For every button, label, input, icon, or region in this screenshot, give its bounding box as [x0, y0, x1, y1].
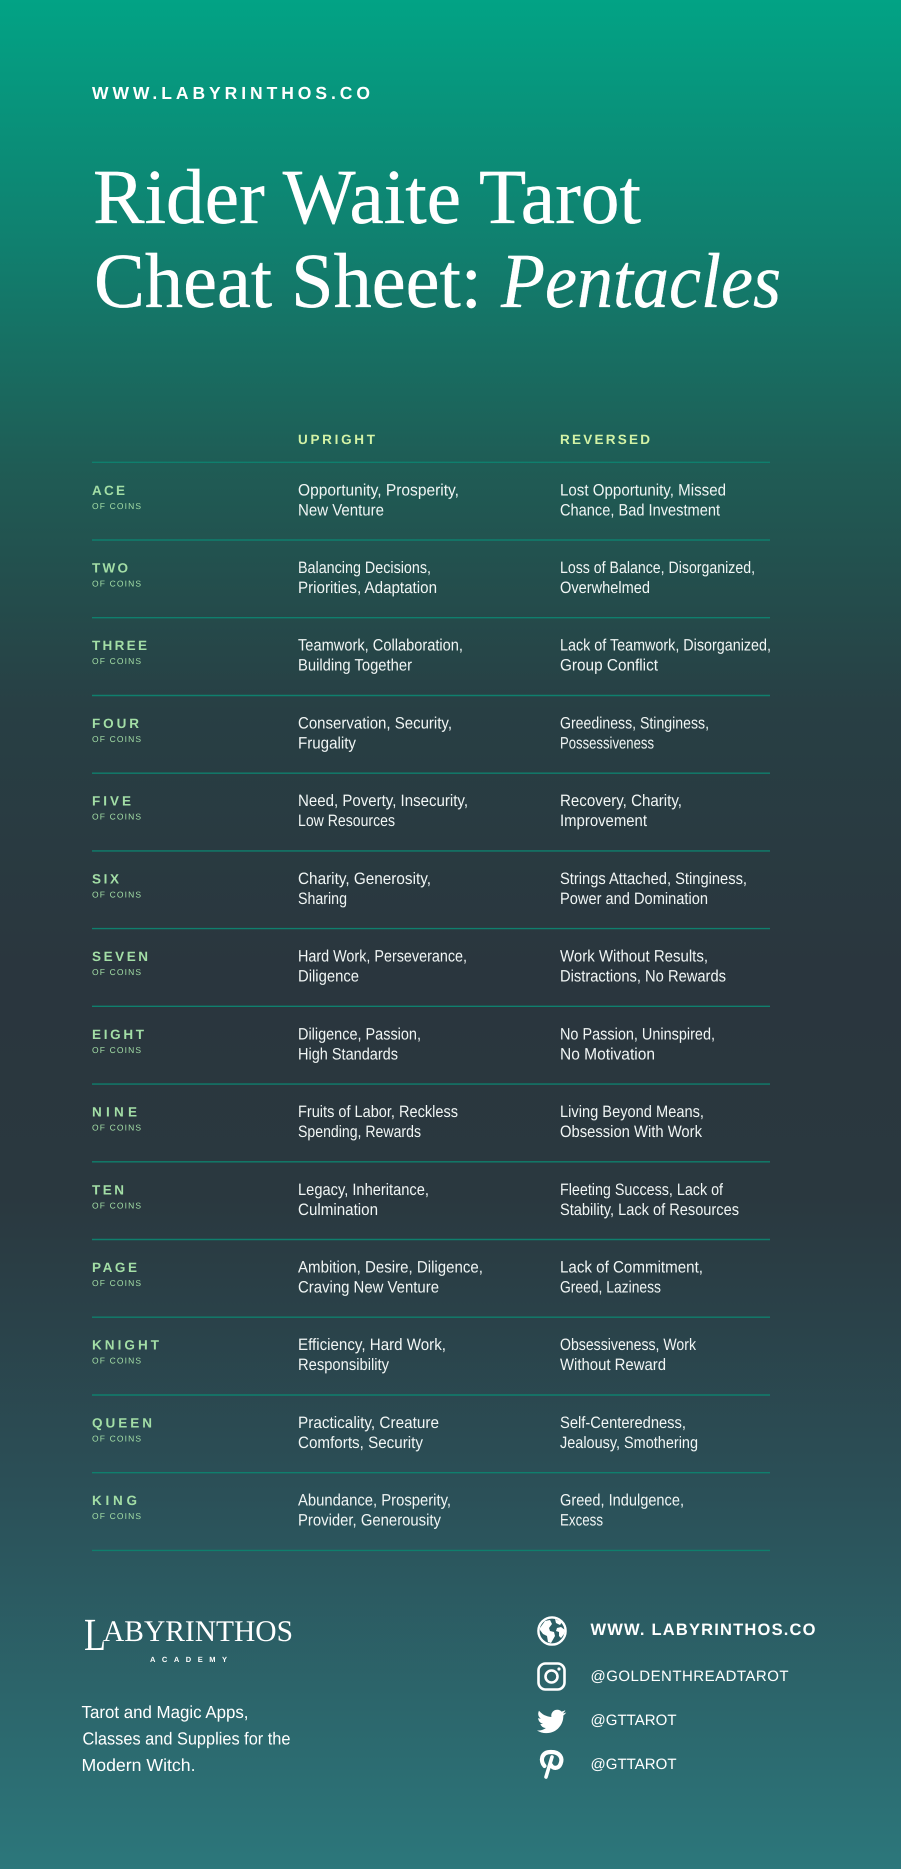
row: knight of coins: KNIGHT [92, 1338, 160, 1353]
row: queen of coins: QUEEN [92, 1416, 152, 1430]
row: five of coins: Low Resources [298, 812, 395, 830]
row: ace of coins: ACE [92, 483, 125, 498]
row: four of coins: FOUR [92, 716, 139, 731]
row: king of coins [92, 1492, 684, 1530]
row: two of coins: Priorities, Adaptation [298, 579, 437, 597]
row: four of coins [92, 714, 709, 752]
footer logo: ABYRINTHOS [103, 1615, 293, 1648]
row: ace of coins: OF COINS [92, 501, 141, 511]
row: seven of coins: Hard Work, Perseverance, [298, 948, 467, 966]
row: nine of coins [92, 1103, 704, 1141]
row: page of coins: Craving New Venture [298, 1278, 439, 1296]
contact: pinterest handle: @GTTAROT [590, 1756, 676, 1773]
row: queen of coins: Comforts, Security [298, 1434, 424, 1452]
row: three of coins: OF COINS [92, 656, 141, 666]
row: king of coins: KING [92, 1493, 137, 1508]
row: nine of coins: Fruits of Labor, Reckless [298, 1103, 458, 1121]
row: seven of coins: Distractions, No Rewards [560, 968, 726, 986]
row: ten of coins: OF COINS [92, 1200, 141, 1210]
row: eight of coins: No Motivation [560, 1045, 655, 1063]
footer logo [84, 1609, 293, 1664]
column headings: UPRIGHT [298, 432, 376, 447]
icon: instagram [538, 1664, 564, 1690]
row: ace of coins [92, 481, 726, 519]
row: knight of coins: Without Reward [560, 1356, 666, 1374]
row: eight of coins: OF COINS [92, 1045, 141, 1055]
row: three of coins [92, 637, 771, 675]
row: eight of coins: EIGHT [92, 1027, 145, 1042]
row: three of coins: Group Conflict [560, 657, 658, 675]
row: four of coins: Possessiveness [560, 734, 654, 752]
title: Rider Waite Tarot [93, 153, 641, 240]
row: eight of coins [92, 1025, 715, 1063]
contact: instagram handle: @GOLDENTHREADTAROT [590, 1668, 788, 1685]
row: page of coins: OF COINS [92, 1278, 141, 1288]
row: four of coins: OF COINS [92, 734, 141, 744]
row: king of coins: Abundance, Prosperity, [298, 1492, 451, 1510]
icon: pinterest [542, 1752, 561, 1777]
row: five of coins: Improvement [560, 812, 647, 830]
row: page of coins: PAGE [92, 1260, 137, 1275]
row: knight of coins: Efficiency, Hard Work, [298, 1336, 446, 1354]
row: ace of coins: Lost Opportunity, Missed [560, 481, 726, 499]
title: Cheat Sheet: [94, 237, 482, 324]
row: six of coins: SIX [92, 871, 119, 886]
row: ten of coins: Legacy, Inheritance, [298, 1181, 429, 1199]
row: ten of coins: Stability, Lack of Resources [560, 1201, 739, 1219]
row: queen of coins: OF COINS [92, 1434, 141, 1444]
row: five of coins: Recovery, Charity, [560, 792, 682, 810]
row: five of coins [92, 792, 682, 830]
row: two of coins: OF COINS [92, 578, 141, 588]
row: six of coins: Strings Attached, Stinginess, [560, 870, 747, 888]
contact: website: WWW. LABYRINTHOS.CO [590, 1621, 816, 1639]
row: ten of coins: Culmination [298, 1201, 378, 1219]
row: five of coins: OF COINS [92, 812, 141, 822]
row: nine of coins: Obsession With Work [560, 1123, 703, 1141]
row: six of coins: OF COINS [92, 889, 141, 899]
footer tagline: Tarot and Magic Apps, [82, 1702, 248, 1722]
row: ten of coins: TEN [92, 1182, 124, 1197]
row: seven of coins: OF COINS [92, 967, 141, 977]
row: two of coins: Loss of Balance, Disorganized, [560, 559, 755, 577]
column headings: REVERSED [560, 432, 650, 447]
icon: twitter [537, 1710, 566, 1733]
column headings [298, 432, 650, 447]
row: six of coins: Sharing [298, 890, 347, 908]
row: ten of coins [92, 1181, 739, 1219]
row: ace of coins: Chance, Bad Investment [560, 501, 720, 519]
row: queen of coins: Self-Centeredness, [560, 1414, 686, 1432]
row: ten of coins: Fleeting Success, Lack of [560, 1181, 723, 1199]
row: king of coins: Provider, Generousity [298, 1512, 442, 1530]
row: page of coins: Lack of Commitment, [560, 1258, 703, 1276]
row: five of coins: FIVE [92, 794, 131, 809]
row: queen of coins [92, 1414, 698, 1452]
row: six of coins: Power and Domination [560, 890, 708, 908]
row: nine of coins: OF COINS [92, 1123, 141, 1133]
row: two of coins: Balancing Decisions, [298, 559, 431, 577]
row: queen of coins: Jealousy, Smothering [560, 1434, 698, 1452]
row: ace of coins: Opportunity, Prosperity, [298, 481, 459, 499]
row: four of coins: Frugality [298, 734, 357, 752]
row: seven of coins: Diligence [298, 968, 359, 986]
row: six of coins [92, 870, 747, 908]
row: page of coins [92, 1258, 703, 1296]
row: two of coins: TWO [92, 560, 128, 576]
row: knight of coins: OF COINS [92, 1356, 141, 1366]
footer logo: ACADEMY [150, 1655, 227, 1664]
row: ace of coins: New Venture [298, 501, 384, 519]
icon: globe [538, 1617, 566, 1645]
row: eight of coins: No Passion, Uninspired, [560, 1025, 715, 1043]
row: three of coins: Lack of Teamwork, Disorganized, [560, 637, 771, 655]
row: four of coins: Conservation, Security, [298, 714, 452, 732]
row: two of coins [92, 559, 755, 597]
row: eight of coins: Diligence, Passion, [298, 1025, 421, 1043]
title: Pentacles [500, 237, 781, 324]
row: six of coins: Charity, Generosity, [298, 870, 431, 888]
row: queen of coins: Practicality, Creature [298, 1414, 439, 1432]
row: king of coins: Excess [560, 1512, 603, 1530]
row: five of coins: Need, Poverty, Insecurity, [298, 792, 468, 810]
row: knight of coins: Obsessiveness, Work [560, 1336, 697, 1354]
row: eight of coins: High Standards [298, 1045, 398, 1063]
row: two of coins: Overwhelmed [560, 579, 650, 597]
footer tagline: Classes and Supplies for the [82, 1728, 290, 1748]
contact: twitter handle: @GTTAROT [590, 1712, 676, 1729]
row: seven of coins [92, 948, 726, 986]
row: three of coins: Building Together [298, 657, 412, 675]
footer logo: L [84, 1609, 106, 1660]
row: four of coins: Greediness, Stinginess, [560, 714, 709, 732]
site url header: WWW.LABYRINTHOS.CO [92, 83, 370, 103]
row: three of coins: Teamwork, Collaboration, [298, 637, 463, 655]
footer tagline [82, 1702, 290, 1775]
row: nine of coins: NINE [92, 1105, 137, 1120]
row: three of coins: THREE [92, 638, 147, 653]
title [93, 153, 781, 324]
row: nine of coins: Spending, Rewards [298, 1123, 421, 1141]
row: king of coins: OF COINS [92, 1511, 141, 1521]
row: page of coins: Ambition, Desire, Diligence, [298, 1258, 483, 1276]
row: nine of coins: Living Beyond Means, [560, 1103, 704, 1121]
row: king of coins: Greed, Indulgence, [560, 1492, 684, 1510]
row: knight of coins [92, 1336, 697, 1374]
row: knight of coins: Responsibility [298, 1356, 390, 1374]
row: page of coins: Greed, Laziness [560, 1278, 661, 1296]
row: seven of coins: Work Without Results, [560, 948, 708, 966]
footer tagline: Modern Witch. [82, 1755, 196, 1775]
row: seven of coins: SEVEN [92, 949, 148, 964]
